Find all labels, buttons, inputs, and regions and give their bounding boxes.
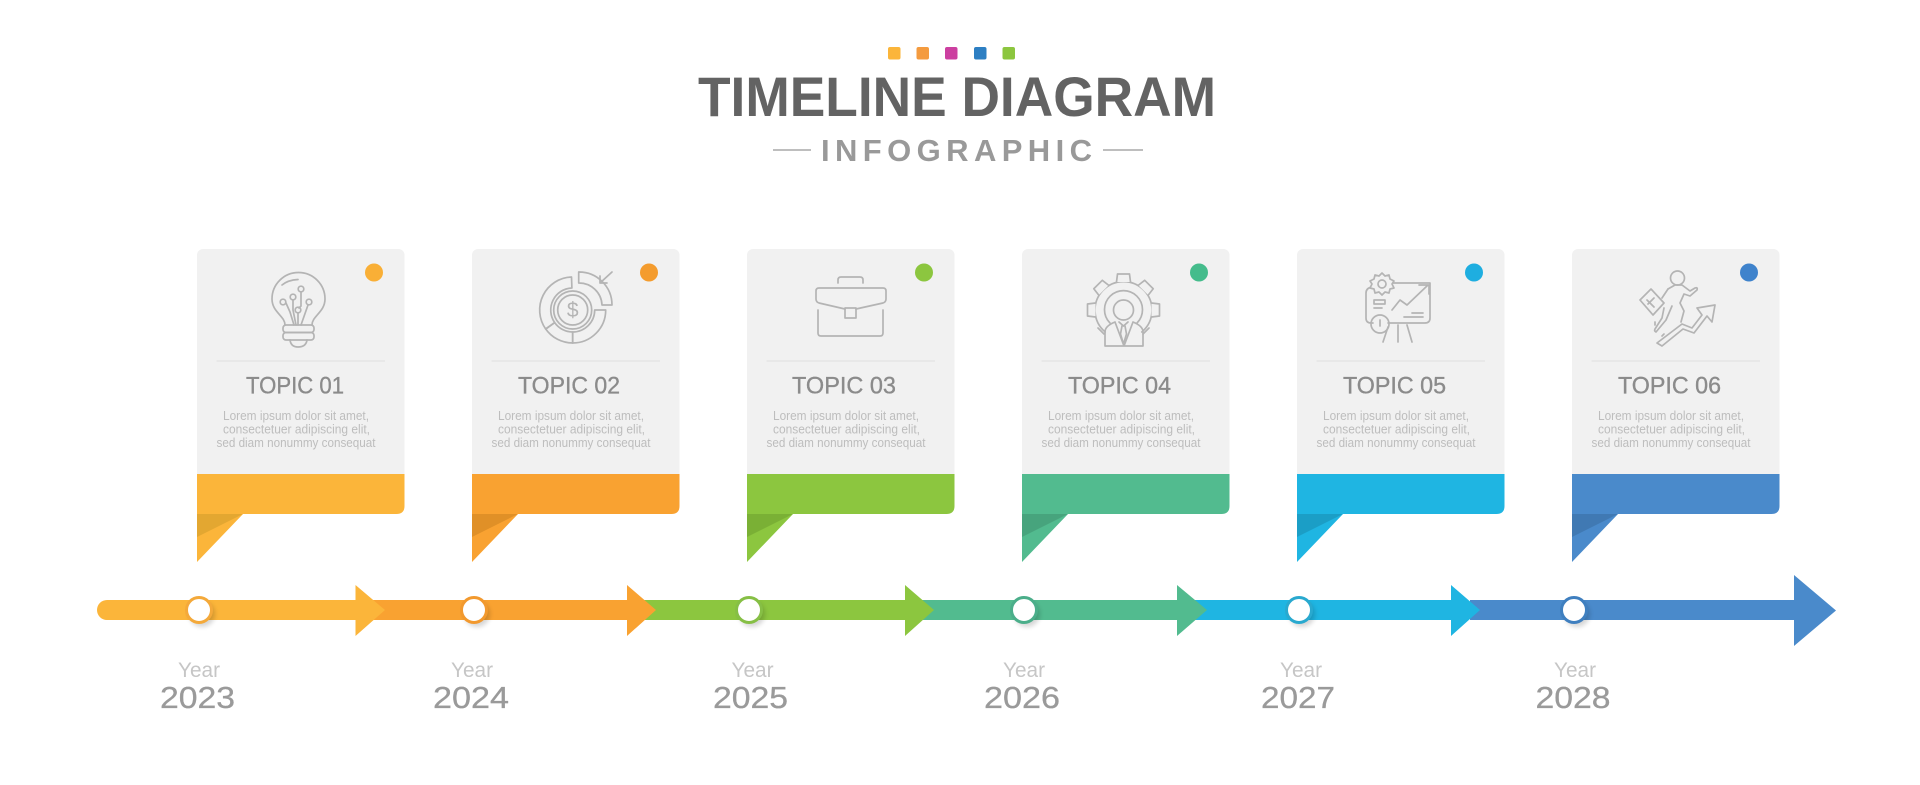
body text xyxy=(492,409,651,450)
year 2024: 2024 xyxy=(433,681,509,715)
body text: consectetuer adipiscing elit, xyxy=(223,422,370,436)
icon: presentation board xyxy=(1366,273,1430,342)
segment 2026 xyxy=(920,585,1207,636)
segment 2023 xyxy=(97,585,385,636)
year 2025: Year xyxy=(732,659,774,682)
card background xyxy=(472,249,680,480)
divider xyxy=(492,360,660,362)
body text: sed diam nonummy consequat xyxy=(1316,436,1476,450)
header xyxy=(698,47,1216,168)
heading: TOPIC 06 xyxy=(1618,372,1721,400)
year 2023 xyxy=(160,659,235,715)
marker 2024 xyxy=(462,598,486,622)
body text xyxy=(1316,409,1476,450)
body text: Lorem ipsum dolor sit amet, xyxy=(1323,409,1469,423)
body text: sed diam nonummy consequat xyxy=(766,436,926,450)
panel: topic 02 xyxy=(472,249,680,562)
year 2025: 2025 xyxy=(713,681,788,715)
marker 2023 xyxy=(186,598,212,622)
status dot xyxy=(640,264,658,282)
body text xyxy=(216,409,376,450)
marker 2028 xyxy=(1562,598,1586,622)
body text: consectetuer adipiscing elit, xyxy=(1323,422,1470,436)
year 2026: Year xyxy=(1003,659,1045,682)
tail fold xyxy=(1572,514,1618,537)
colour squares xyxy=(888,47,1015,60)
body text xyxy=(766,409,926,450)
year 2023: 2023 xyxy=(160,681,235,715)
divider xyxy=(766,360,935,362)
body text: Lorem ipsum dolor sit amet, xyxy=(498,409,644,423)
segment 2028 xyxy=(1470,575,1836,646)
year 2028: Year xyxy=(1554,659,1596,682)
body text: Lorem ipsum dolor sit amet, xyxy=(223,409,369,423)
tail fold xyxy=(197,514,243,537)
divider xyxy=(1042,360,1210,362)
year 2027: 2027 xyxy=(1261,681,1335,715)
body text: consectetuer adipiscing elit, xyxy=(498,422,645,436)
year 2025 xyxy=(713,659,788,715)
body text: Lorem ipsum dolor sit amet, xyxy=(773,409,919,423)
status dot xyxy=(365,264,383,282)
body text: sed diam nonummy consequat xyxy=(1042,436,1201,450)
panel: topic 03 xyxy=(747,249,954,562)
card background xyxy=(1297,249,1504,480)
body text xyxy=(1592,409,1751,450)
year 2026 xyxy=(984,659,1060,715)
body text: sed diam nonummy consequat xyxy=(216,436,376,450)
body text: Lorem ipsum dolor sit amet, xyxy=(1598,409,1744,423)
panel: topic 01 xyxy=(197,249,404,562)
body text: sed diam nonummy consequat xyxy=(1592,436,1751,450)
year 2024: Year xyxy=(451,659,493,682)
marker 2025 xyxy=(736,598,762,622)
body text: consectetuer adipiscing elit, xyxy=(1048,422,1195,436)
icon glyph: dollar: $ xyxy=(567,299,579,322)
marker shadows xyxy=(189,601,1590,627)
segment 2025 xyxy=(640,585,934,636)
panel: topic 04 xyxy=(1022,249,1230,562)
tail fold xyxy=(1297,514,1343,537)
card background xyxy=(747,249,954,480)
icon: briefcase xyxy=(816,277,886,336)
subtitle: INFOGRAPHIC xyxy=(821,133,1092,168)
body text xyxy=(1042,409,1201,450)
year 2027: Year xyxy=(1280,659,1322,682)
year 2026: 2026 xyxy=(984,681,1060,715)
body text: Lorem ipsum dolor sit amet, xyxy=(1048,409,1194,423)
colour band with tail xyxy=(1297,474,1504,562)
year 2028: 2028 xyxy=(1536,681,1610,715)
segment 2024 xyxy=(370,585,656,636)
heading: TOPIC 02 xyxy=(518,372,620,400)
year 2023: Year xyxy=(178,659,220,682)
icon: light bulb xyxy=(272,272,325,347)
marker 2027 xyxy=(1286,598,1312,622)
card background xyxy=(1022,249,1230,480)
colour band with tail xyxy=(1572,474,1780,562)
heading: TOPIC 04 xyxy=(1068,372,1171,400)
icon: running businessman on rising arrow xyxy=(1640,271,1715,346)
status dot xyxy=(915,264,933,282)
colour band with tail xyxy=(1022,474,1230,562)
divider xyxy=(216,360,385,362)
body text: consectetuer adipiscing elit, xyxy=(773,422,920,436)
segment 2027 xyxy=(1190,585,1480,636)
colour band with tail xyxy=(747,474,954,562)
divider xyxy=(1592,360,1760,362)
tail fold xyxy=(747,514,793,537)
card background xyxy=(1572,249,1780,480)
colour band with tail xyxy=(472,474,680,562)
card background xyxy=(197,249,404,480)
status dot xyxy=(1465,264,1483,282)
year 2028 xyxy=(1536,659,1610,715)
status dot xyxy=(1190,264,1208,282)
year 2024 xyxy=(433,659,509,715)
marker 2026 xyxy=(1012,598,1036,622)
year 2027 xyxy=(1261,659,1335,715)
heading: TOPIC 03 xyxy=(792,372,896,400)
heading: TOPIC 05 xyxy=(1343,372,1446,400)
body text: sed diam nonummy consequat xyxy=(492,436,651,450)
title: TIMELINE DIAGRAM xyxy=(698,65,1216,128)
year labels xyxy=(160,659,1610,715)
tail fold xyxy=(1022,514,1068,537)
colour band with tail xyxy=(197,474,404,562)
heading: TOPIC 01 xyxy=(246,372,344,400)
tail fold xyxy=(472,514,518,537)
panel: topic 06 xyxy=(1572,249,1780,562)
icon: gear with person xyxy=(1088,274,1160,346)
timeline arrow xyxy=(97,575,1836,646)
icon: dollar target chart xyxy=(540,272,612,343)
panel: topic 05 xyxy=(1297,249,1504,562)
body text: consectetuer adipiscing elit, xyxy=(1598,422,1745,436)
status dot xyxy=(1740,264,1758,282)
divider xyxy=(1316,360,1485,362)
